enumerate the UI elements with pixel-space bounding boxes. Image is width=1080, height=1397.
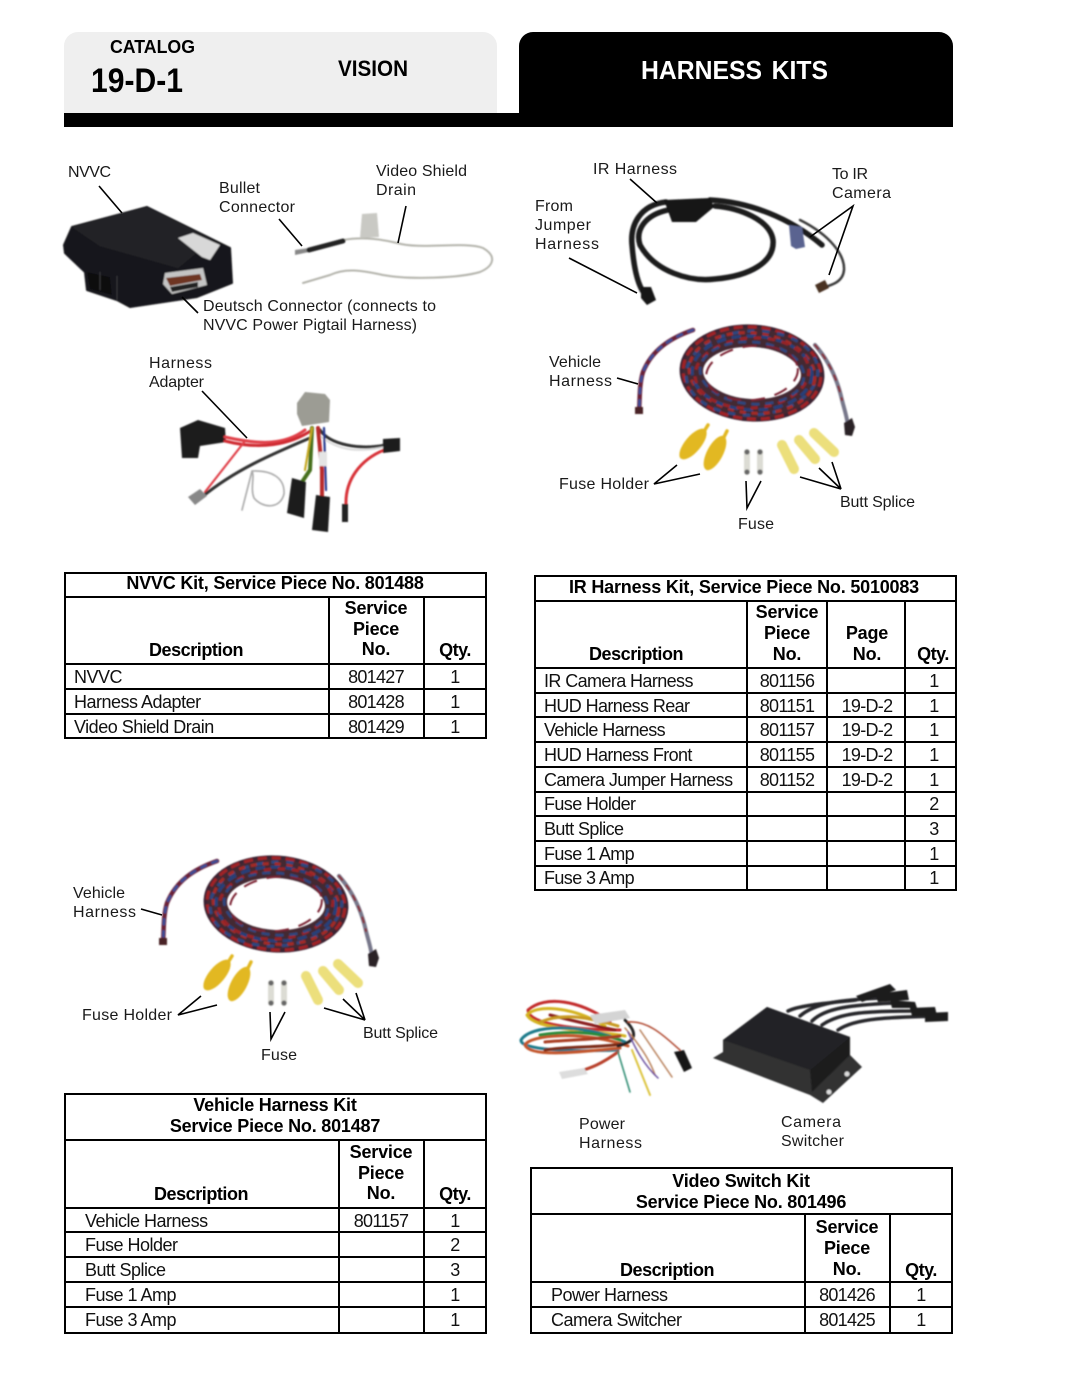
column headers: Qty. <box>439 640 471 660</box>
callout: vehicle harness (left): Harness <box>73 904 136 921</box>
column headers: Service <box>350 1142 413 1162</box>
table: video switch kit <box>531 1168 952 1333</box>
table title <box>170 1095 380 1136</box>
column headers: No. <box>833 1259 861 1279</box>
column headers <box>154 1142 471 1204</box>
rows: 1 <box>929 671 939 691</box>
photo: power harness <box>521 1001 692 1095</box>
page number: 19-D-1 <box>91 62 183 100</box>
callout: fuse (right) <box>738 481 774 533</box>
rows <box>74 667 460 737</box>
callout: fuse (left) <box>261 1012 297 1064</box>
callout: fuse (left): Fuse <box>261 1047 297 1064</box>
rows: 1 <box>929 696 939 716</box>
rows: 1 <box>929 745 939 765</box>
callout: to IR camera: Camera <box>832 185 891 202</box>
rows: Harness Adapter <box>74 692 201 712</box>
caption: power harness <box>579 1116 642 1152</box>
callout: to IR camera: To IR <box>832 166 868 183</box>
table title: Service Piece No. 801487 <box>170 1116 380 1136</box>
section: vision: VISION <box>338 56 408 81</box>
rows: 801155 <box>760 745 815 765</box>
rows: 19-D-2 <box>842 696 893 716</box>
callout: vehicle harness (right) <box>549 354 638 390</box>
callout: vehicle harness (right): Vehicle <box>549 354 601 371</box>
callout: butt splice (left) <box>324 993 438 1042</box>
rows: Camera Switcher <box>551 1310 682 1330</box>
column headers: Service <box>345 598 408 618</box>
caption: power harness: Harness <box>579 1135 642 1152</box>
rows: 801427 <box>348 667 405 687</box>
column headers: No. <box>362 639 390 659</box>
rows: 1 <box>929 770 939 790</box>
callout: Deutsch connector: Deutsch Connector (connects to <box>203 298 436 315</box>
rows: Vehicle Harness <box>85 1211 208 1231</box>
column headers: Description <box>620 1260 714 1280</box>
callout: NVVC: NVVC <box>68 164 111 181</box>
callout: butt splice (left): Butt Splice <box>363 1025 438 1042</box>
rows: 801429 <box>348 717 405 737</box>
callout: butt splice (right): Butt Splice <box>840 494 915 511</box>
rows: Vehicle Harness <box>544 720 666 740</box>
column headers: Piece <box>764 623 810 643</box>
rows: 1 <box>929 844 939 864</box>
rows: Fuse Holder <box>85 1235 178 1255</box>
callout: bullet connector: Connector <box>219 199 296 216</box>
photo: vehicle harness kit (right) <box>635 321 855 475</box>
header: black title tab <box>64 32 953 127</box>
rows: 1 <box>450 1310 460 1330</box>
rows: Butt Splice <box>85 1260 166 1280</box>
photo: camera switcher <box>713 984 948 1103</box>
callout: fuse holder (left): Fuse Holder <box>82 1007 173 1024</box>
rows: Fuse 3 Amp <box>85 1310 177 1330</box>
callout: bullet connector <box>219 180 302 246</box>
callout: bullet connector: Bullet <box>219 180 261 197</box>
rows: 19-D-2 <box>842 770 893 790</box>
rows: 19-D-2 <box>842 745 893 765</box>
column headers: Description <box>154 1184 248 1204</box>
column headers <box>149 598 471 660</box>
callout: from jumper harness: Jumper <box>535 217 592 234</box>
column headers: No. <box>367 1183 395 1203</box>
table: NVVC kit <box>65 573 486 738</box>
callout: harness adapter <box>149 355 247 438</box>
rows: 801425 <box>819 1310 876 1330</box>
rows: 3 <box>450 1260 460 1280</box>
photo: harness adapter <box>180 392 400 532</box>
rows <box>544 671 939 888</box>
column headers <box>589 602 949 664</box>
rows: Power Harness <box>551 1285 668 1305</box>
rows: 1 <box>450 692 460 712</box>
rows: 1 <box>929 868 939 888</box>
column headers: Description <box>149 640 243 660</box>
rows: Fuse 3 Amp <box>544 868 635 888</box>
column headers: Piece <box>358 1163 404 1183</box>
rows: 801426 <box>819 1285 876 1305</box>
table title: Service Piece No. 801496 <box>636 1192 846 1212</box>
column headers: Qty. <box>917 644 949 664</box>
rows: 19-D-2 <box>842 720 893 740</box>
column headers: Description <box>589 644 683 664</box>
callout: from jumper harness: From <box>535 198 573 215</box>
title: HARNESS KITS <box>641 55 828 85</box>
rows: Fuse 1 Amp <box>85 1285 177 1305</box>
column headers: Piece <box>824 1238 870 1258</box>
rows: 801156 <box>760 671 815 691</box>
callout: vehicle harness (right): Harness <box>549 373 612 390</box>
column headers: Service <box>756 602 819 622</box>
callout: fuse holder (right) <box>559 465 700 493</box>
rows: 3 <box>929 819 939 839</box>
rows: HUD Harness Rear <box>544 696 690 716</box>
caption: camera switcher <box>781 1114 845 1150</box>
rows: 1 <box>929 720 939 740</box>
caption: camera switcher: Switcher <box>781 1133 845 1150</box>
rows: NVVC <box>74 667 123 687</box>
photo: video shield drain <box>295 213 492 283</box>
column headers: Page <box>846 623 888 643</box>
callout: harness adapter: Harness <box>149 355 212 372</box>
rows: Camera Jumper Harness <box>544 770 733 790</box>
column headers: Piece <box>353 619 399 639</box>
column headers <box>620 1217 937 1280</box>
callout: fuse holder (right): Fuse Holder <box>559 476 650 493</box>
caption: power harness: Power <box>579 1116 626 1133</box>
table title: NVVC Kit, Service Piece No. 801488 <box>126 573 424 593</box>
callout: Deutsch connector <box>182 297 436 334</box>
rows: 801152 <box>760 770 815 790</box>
rows: 801157 <box>354 1211 409 1231</box>
callout: IR harness <box>593 161 677 203</box>
table title: Video Switch Kit <box>672 1171 810 1191</box>
caption: camera switcher: Camera <box>781 1114 841 1131</box>
rows: 801151 <box>760 696 815 716</box>
photo: NVVC module <box>64 207 232 307</box>
table title: Vehicle Harness Kit <box>193 1095 357 1115</box>
rows: 801428 <box>348 692 405 712</box>
column headers: No. <box>773 644 801 664</box>
callout: to IR camera <box>810 166 891 275</box>
rows: 2 <box>450 1235 460 1255</box>
callout: vehicle harness (left) <box>73 885 162 921</box>
table title: IR Harness Kit, Service Piece No. 5010083 <box>569 577 919 597</box>
callout: NVVC <box>68 164 122 213</box>
rows: 1 <box>916 1310 926 1330</box>
rows: Fuse 1 Amp <box>544 844 635 864</box>
rows: Butt Splice <box>544 819 624 839</box>
catalog label: CATALOG <box>110 37 195 57</box>
rows: Fuse Holder <box>544 794 636 814</box>
callout: vehicle harness (left): Vehicle <box>73 885 125 902</box>
rows: IR Camera Harness <box>544 671 693 691</box>
photo: IR harness <box>632 198 844 305</box>
rows <box>85 1211 460 1330</box>
column headers: Qty. <box>439 1184 471 1204</box>
callout: video shield drain: Drain <box>376 182 416 199</box>
rows: 1 <box>450 717 460 737</box>
callout: from jumper harness <box>535 198 637 293</box>
rows: 801157 <box>760 720 815 740</box>
callout: video shield drain <box>376 163 467 243</box>
rows: 2 <box>929 794 939 814</box>
rows <box>551 1285 926 1330</box>
table: vehicle harness kit <box>65 1094 486 1333</box>
callout: butt splice (right) <box>800 462 915 511</box>
callout: fuse holder (left) <box>82 996 217 1024</box>
callout: fuse (right): Fuse <box>738 516 774 533</box>
header: catalog tab <box>64 32 497 113</box>
rows: 1 <box>450 667 460 687</box>
callout: IR harness: IR Harness <box>593 161 677 178</box>
column headers: Qty. <box>905 1260 937 1280</box>
rows: 1 <box>450 1285 460 1305</box>
column headers: No. <box>853 644 881 664</box>
table title <box>636 1171 846 1212</box>
rows: 1 <box>916 1285 926 1305</box>
table: IR harness kit <box>535 576 956 890</box>
column headers: Service <box>816 1217 879 1237</box>
callout: harness adapter: Adapter <box>149 374 205 391</box>
rows: 1 <box>450 1211 460 1231</box>
callout: from jumper harness: Harness <box>535 236 599 253</box>
callout: video shield drain: Video Shield <box>376 163 467 180</box>
rows: Video Shield Drain <box>74 717 214 737</box>
photo: vehicle harness kit (left) <box>159 852 379 1006</box>
callout: Deutsch connector: NVVC Power Pigtail Harness) <box>203 317 417 334</box>
rows: HUD Harness Front <box>544 745 692 765</box>
